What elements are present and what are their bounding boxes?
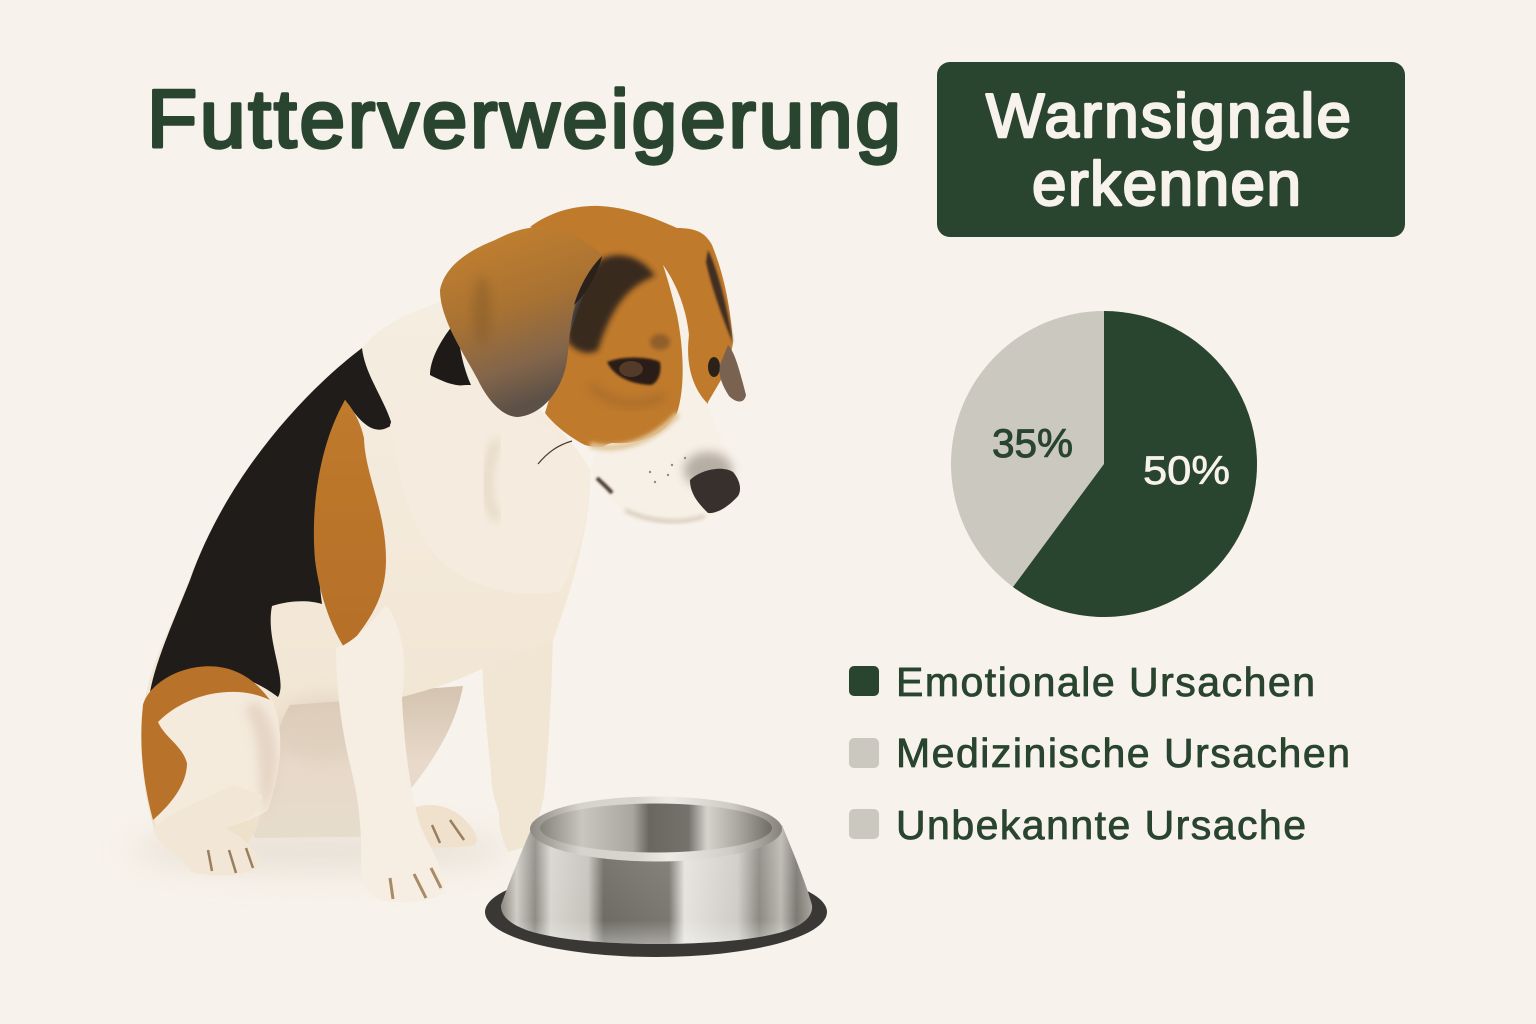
- toe lines: [208, 820, 464, 873]
- belly shade: [225, 686, 463, 838]
- inner bowl: [540, 804, 772, 852]
- slice: 50%: [1013, 311, 1257, 617]
- pie chart: [951, 311, 1257, 617]
- black neck patch: [430, 320, 471, 386]
- haunch white: [145, 675, 280, 835]
- front paw toes: [390, 868, 441, 899]
- far ear tip: [719, 345, 746, 402]
- rim: [530, 796, 782, 862]
- dark patch: [567, 255, 655, 353]
- belly soft top: [277, 698, 373, 762]
- skull tan: [530, 206, 733, 447]
- chest fur: [390, 385, 590, 594]
- cheek shade: [590, 385, 665, 404]
- ear inner dark: [574, 256, 602, 305]
- near ear: [440, 227, 602, 417]
- rubber base: [485, 867, 827, 957]
- tan shoulder: [314, 400, 386, 650]
- fringe: [590, 414, 678, 447]
- legend: Emotionale Ursachen: Emotionale Ursachen: [896, 659, 1315, 705]
- whisker: [538, 441, 572, 464]
- floor shadow: [130, 828, 510, 872]
- haunch shade: [245, 700, 277, 815]
- rear paw behind leg: [405, 805, 477, 847]
- title: Futterverweigerung: [147, 74, 901, 165]
- nose shade: [684, 452, 732, 488]
- hind leg and paw: [153, 785, 262, 875]
- head: [440, 206, 746, 523]
- left eye: [607, 357, 661, 385]
- ear shade: [473, 276, 491, 344]
- white stripe and muzzle: [590, 265, 741, 523]
- brow spot: [650, 334, 670, 350]
- body sheen: [501, 825, 812, 944]
- jaw shade: [625, 510, 705, 521]
- illustration: metal bowl: [485, 796, 827, 957]
- mouth shade: [597, 478, 612, 493]
- illustration: dog: [130, 206, 746, 902]
- far ear strip: [706, 250, 733, 343]
- right eye: [708, 357, 720, 377]
- slice: 35%: [951, 311, 1257, 617]
- bowl body: [501, 825, 812, 944]
- body white base: [142, 300, 590, 854]
- main front leg: [336, 605, 445, 902]
- legend: Unbekannte Ursache: Unbekannte Ursache: [896, 802, 1306, 848]
- haunch tan upper: [141, 666, 270, 820]
- black saddle: [150, 348, 392, 697]
- badge: Warnsignale erkennen: erkennen: [1032, 150, 1301, 219]
- chest shade: [488, 440, 497, 520]
- legend: [849, 659, 1350, 848]
- badge: Warnsignale erkennen: Warnsignale: [986, 82, 1351, 151]
- legend: Medizinische Ursachen: Medizinische Ursachen: [896, 730, 1350, 776]
- freckles: [649, 457, 686, 483]
- badge: Warnsignale erkennen: [937, 62, 1405, 237]
- far front leg: [482, 630, 553, 852]
- label 35%: 35%: [992, 422, 1073, 466]
- nose: [690, 469, 740, 513]
- label 50%: 50%: [1143, 449, 1230, 493]
